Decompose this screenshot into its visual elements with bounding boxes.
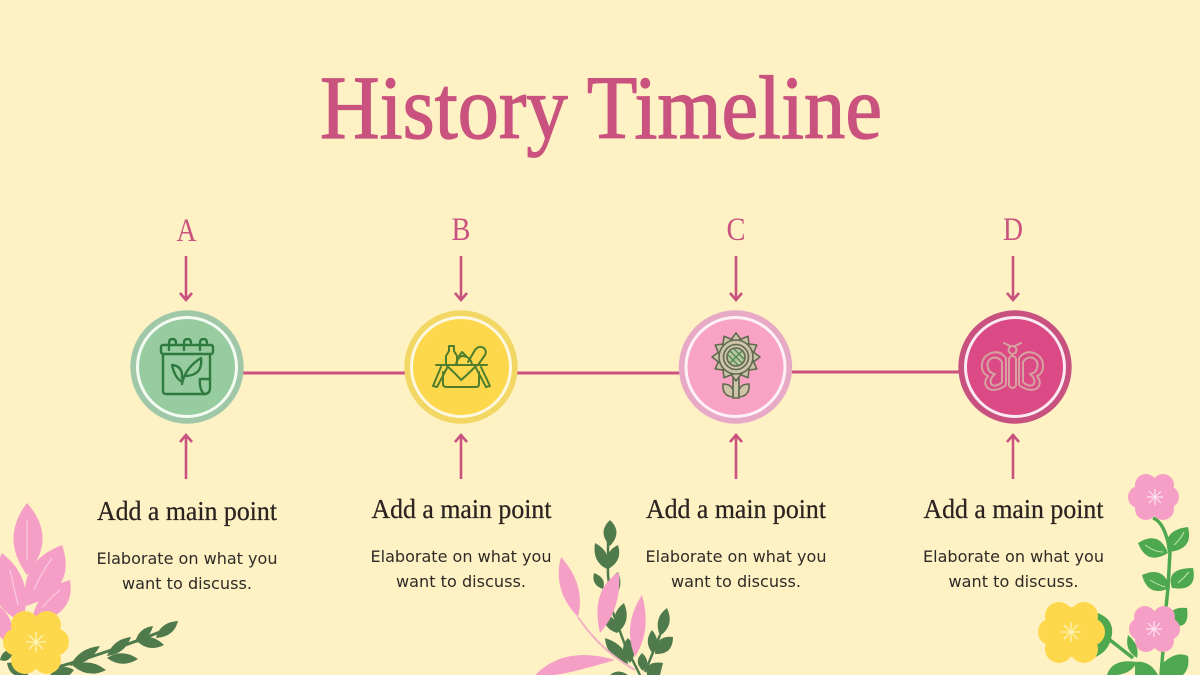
- arrow up D: [1007, 435, 1019, 479]
- green leaves: [1088, 527, 1194, 675]
- pink flower bottom: [1129, 606, 1180, 652]
- icon: sunflower: [679, 310, 792, 424]
- pink leaves: [0, 503, 71, 645]
- body text A: want to discuss.: [122, 574, 252, 593]
- yellow flower stamen: [1061, 622, 1081, 642]
- icon: calendar with leaf: [130, 310, 244, 424]
- letter D: D: [1003, 212, 1023, 248]
- body text A: Elaborate on what you: [96, 549, 278, 568]
- leaf veins: [10, 520, 60, 608]
- letter C: C: [726, 212, 746, 248]
- body text D: Elaborate on what you: [923, 547, 1104, 566]
- arrow up B: [455, 435, 467, 479]
- milestone C: [646, 212, 826, 591]
- green stems: [1110, 518, 1170, 675]
- heading B: Add a main point: [372, 494, 552, 524]
- arrow up A: [180, 435, 192, 479]
- arrow down B: [455, 256, 467, 300]
- green sprig: [0, 621, 178, 675]
- heading C: Add a main point: [646, 494, 826, 524]
- arrow down D: [1007, 256, 1019, 300]
- title: History Timeline: [320, 59, 882, 158]
- timeline connector line: [243, 372, 959, 373]
- green branch: [593, 520, 673, 675]
- pink flower top stamen: [1147, 489, 1163, 505]
- pink flower bottom stamen: [1146, 621, 1162, 637]
- heading D: Add a main point: [924, 494, 1104, 524]
- body text B: want to discuss.: [396, 572, 526, 591]
- icon: butterfly: [958, 310, 1072, 424]
- decoration: bottom-right floral: [1038, 474, 1194, 675]
- leaf highlights: [1145, 532, 1189, 587]
- icon: picnic basket: [404, 310, 518, 424]
- decoration: bottom-left floral: [0, 503, 178, 675]
- flower stamen: [26, 632, 46, 652]
- pink leaves: [535, 557, 646, 675]
- milestone A: [96, 213, 278, 593]
- pink flower top: [1128, 474, 1179, 520]
- body text C: Elaborate on what you: [646, 547, 826, 566]
- letter A: A: [176, 213, 197, 249]
- heading A: Add a main point: [97, 496, 277, 526]
- milestone D: [923, 212, 1104, 591]
- yellow flower: [1038, 602, 1105, 663]
- milestone B: [370, 212, 552, 591]
- body text C: want to discuss.: [671, 572, 801, 591]
- arrow down A: [180, 256, 192, 300]
- arrow down C: [730, 256, 742, 300]
- letter B: B: [452, 212, 470, 248]
- body text B: Elaborate on what you: [370, 547, 552, 566]
- body text D: want to discuss.: [948, 572, 1078, 591]
- decoration: bottom-center plant: [535, 520, 673, 675]
- arrow up C: [730, 435, 742, 479]
- yellow flower: [3, 611, 69, 674]
